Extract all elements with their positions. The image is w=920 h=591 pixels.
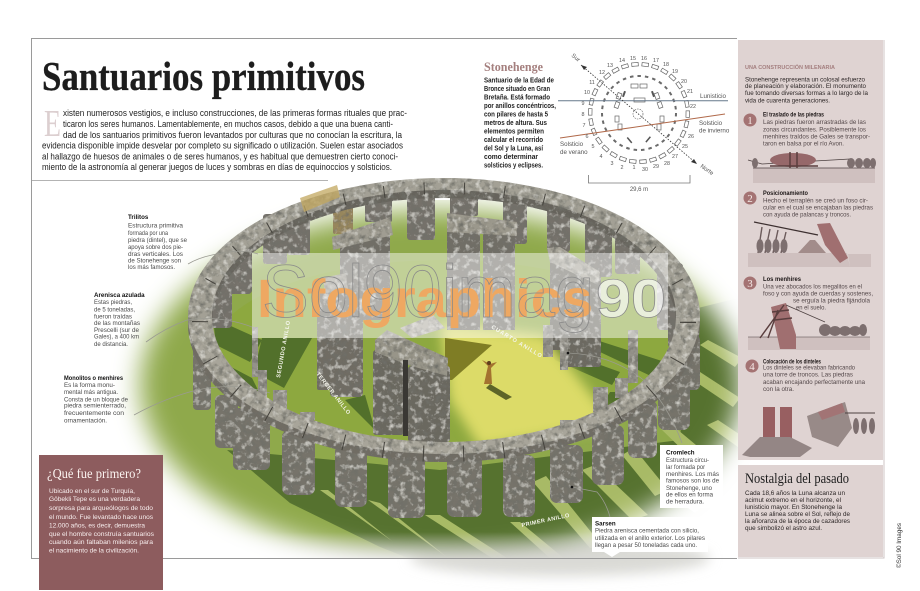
callout: Arenisca azulada: [94, 292, 145, 348]
stone numbers: 6: [586, 134, 588, 140]
callout: Cromlech: lar formada por: [666, 464, 705, 471]
panel: Nostalgia del pasado: la añoranza de la época de cazadores: [745, 518, 850, 525]
step 4 text: [746, 358, 865, 393]
callout: Trilitos: Estructura primitiva: [128, 222, 184, 230]
callout: Cromlech: [660, 445, 723, 513]
dark shadow mass: [227, 302, 738, 554]
stone numbers: 15: [630, 56, 636, 62]
leader lines: [134, 251, 682, 517]
panel: Stonehenge description: Santuario de la Edad de: [484, 78, 554, 84]
intro: [745, 76, 868, 104]
stone numbers: 14: [619, 58, 625, 64]
light streaks: [320, 340, 745, 560]
step 2 text: con ayuda de palancas y troncos.: [763, 212, 851, 218]
callout: Arenisca azulada: Prescelli (sur de: [94, 327, 140, 334]
callout: Sarsen: [592, 517, 708, 557]
callout: Sarsen: Piedra arenisca cementada con silicio,: [595, 528, 699, 534]
step 4 text: Colocación de los dinteles: [763, 358, 821, 366]
panel: Qué fue primero: [39, 455, 163, 590]
label: tercer anillo: TERCER ANILLO: [314, 372, 351, 416]
step 3 text: en el suelo.: [796, 304, 826, 312]
intro text: ticaron los seres humanos. Lamentablemente, en muchos casos, debido a que una buena canti-: [63, 119, 393, 129]
front pillars of outer ring: [193, 335, 700, 518]
label: primer anillo: PRIMER ANILLO: [521, 513, 571, 529]
panel: Qué fue primero: el mundo. Fue levantado hace unos: [49, 514, 153, 521]
lintel joints at the front: [192, 321, 696, 462]
ochre highlighted lintel: [300, 185, 340, 212]
panel: Una construcción milenaria: [738, 40, 883, 460]
label: cuarto anillo: CUARTO ANILLO: [490, 325, 543, 360]
north-south axis: [581, 65, 697, 164]
stone numbers: 16: [641, 56, 647, 62]
step 3 text: Los menhires: [763, 276, 801, 283]
bluestone ring: [602, 76, 676, 150]
panel: Stonehenge description: metros de altura. Sus: [484, 120, 547, 127]
panel: Stonehenge description: como determinar: [484, 154, 538, 161]
stone numbers: 29: [653, 164, 659, 170]
step 3 illustration: raising stone: [748, 303, 870, 350]
callout: Arenisca azulada: fueron traídas: [94, 314, 132, 320]
step 1 text: 1: [747, 115, 753, 127]
interior floor: [212, 260, 676, 444]
callout: Arenisca azulada: Gales), a 400 km: [94, 334, 139, 340]
stone numbers: 10: [584, 90, 590, 96]
back lintels of outer ring: [188, 178, 700, 318]
trilithon upper middle: [447, 213, 517, 330]
callout: Trilitos: Trilitos: [128, 214, 149, 221]
intro text: al hallazgo de huesos de animales o de seres humanos, y es habitual que demuestren cierto conoci-: [42, 152, 398, 162]
panel: Nostalgia del pasado: que simbolizó el astro azul.: [745, 525, 822, 532]
callout: Cromlech: famosos son los de: [666, 478, 720, 484]
intro text: dad de los santuarios primitivos fueron levantados por culturas que no conocían la escritura, la: [63, 130, 402, 140]
callout: Cromlech: Estructura circu-: [666, 457, 709, 464]
panel: Qué fue primero: el nacimiento de la civilización.: [49, 548, 139, 554]
intro: vida de cuarenta generaciones.: [745, 98, 830, 104]
step 2 text: 2: [747, 193, 753, 205]
callout: Monolitos o menhires: Consta de un bloque de: [64, 396, 129, 404]
panel: Nostalgia del pasado: acimut extremo en el horizonte, el: [745, 497, 841, 504]
step 1 text: Las piedras fueron arrastradas de las: [763, 119, 866, 126]
ground shadow: [410, 540, 710, 576]
scale bracket: 29,6 m: [630, 187, 648, 193]
step 4 text: una torre de troncos. Las piedras: [763, 372, 853, 378]
step 2 text: Hecho el terraplén se creó un foso cir-: [763, 198, 868, 204]
callout: Monolitos o menhires: frecuentemente con: [64, 410, 125, 417]
interior shadows: [213, 318, 665, 430]
callout: Trilitos: [128, 214, 188, 271]
panel: Stonehenge description: [484, 59, 556, 170]
callout: Cromlech: Cromlech: [666, 450, 695, 456]
drop cap: E: [44, 103, 61, 145]
callout: Trilitos: formada por una: [128, 230, 168, 237]
gap in front trilithon: [403, 360, 408, 436]
callout: Cromlech: Stonehenge, uno: [666, 485, 713, 492]
step 2 text: Posicionamiento: [763, 190, 808, 197]
intro: Stonehenge representa un colosal esfuerzo: [745, 76, 865, 84]
direction labels: de verano: [560, 149, 588, 156]
callout: Arenisca azulada: de 5 toneladas,: [94, 306, 135, 314]
stone numbers: 3: [610, 161, 614, 167]
intro text: xisten numerosos vestigios, e incluso construcciones, de las primeras formas rituales que prac-: [63, 108, 407, 118]
panel: Qué fue primero: Ubicado en el sur de Turquía,: [49, 488, 135, 495]
stone numbers: 11: [589, 80, 595, 86]
step 1 text: zonas circundantes. Posiblemente los: [763, 126, 866, 134]
callout: Arenisca azulada: Estas piedras,: [94, 299, 132, 306]
stone numbers: 12: [599, 70, 605, 76]
stone numbers: 4: [600, 154, 602, 160]
solstice line: [560, 114, 725, 138]
step 1 text: [744, 112, 870, 148]
step 1 text: taron en balsa por el río Avon.: [763, 140, 844, 148]
panel: Qué fue primero: sorpresa para arqueólogos de todo: [49, 505, 153, 512]
panel: Stonehenge description: por anillos concéntricos,: [484, 103, 556, 110]
direction labels: Norte: [699, 164, 715, 177]
stone numbers: 7: [582, 123, 586, 129]
trilithon right: [547, 247, 601, 367]
step 2 illustration: lever: [748, 222, 871, 267]
step 1 text: El traslado de las piedras: [763, 112, 824, 118]
intro text: [42, 103, 407, 172]
panel: Nostalgia del pasado: lunisticio mayor. En Stonehenge la: [745, 504, 842, 511]
step 2 text: [744, 190, 873, 218]
stone numbers: 17: [653, 58, 659, 64]
panel: Stonehenge description: Bretaña. Está formado: [484, 94, 550, 102]
callout: Trilitos: piedra (dintel), que se: [128, 237, 188, 244]
callout: Cromlech: menhires. Los más: [666, 471, 719, 478]
step 3 text: se erguía la piedra fijándola: [793, 298, 870, 304]
step 4 text: 4: [749, 361, 755, 373]
step 1 text: menhires traídos de Gales se transpor-: [763, 134, 870, 140]
direction labels: Lunisticio: [700, 93, 727, 100]
callout: Arenisca azulada: de las montañas: [94, 320, 140, 327]
bluestones: [252, 325, 638, 428]
stone numbers: 30: [642, 167, 648, 173]
callout: Monolitos o menhires: mental más antigua.: [64, 389, 118, 396]
central stone: [633, 109, 643, 119]
callout: Sarsen: llegan a pesar 50 toneladas cada uno.: [595, 542, 697, 549]
trilithon upper left: [332, 217, 393, 320]
panel: Stonehenge description: solsticios y eclipses.: [484, 162, 543, 170]
title: Santuarios primitivos: [42, 53, 365, 99]
stone numbers: 20: [681, 79, 687, 85]
callout: Cromlech: de ellos en forma: [666, 492, 714, 498]
central altar slab: [400, 315, 445, 338]
step 2 text: cular en el cual se encajaban las piedras: [763, 204, 873, 212]
direction labels: Solsticio: [699, 120, 723, 127]
callout: Monolitos o menhires: [64, 375, 129, 424]
stone numbers: 28: [664, 161, 670, 167]
callout: Trilitos: los más famosos.: [128, 264, 175, 271]
inner horseshoe: [614, 84, 664, 130]
panel: Qué fue primero: cuando aún faltaban milenios para: [49, 539, 153, 546]
stone numbers: 9: [582, 101, 584, 107]
page frame: [32, 38, 737, 558]
stone numbers: 2: [620, 165, 624, 171]
step 3 text: [744, 276, 873, 312]
callout: Monolitos o menhires: piedra semienterrado,: [64, 402, 126, 410]
watermark outline word: Sol90imag: [262, 250, 594, 333]
callout: Sarsen: utilizada en el anillo exterior. Los pilares: [595, 535, 705, 542]
callout: Trilitos: apoya sobre dos pie-: [128, 244, 183, 251]
intro text: evidencia disponible impide desvelar por completo su significado o utilización. Suelen estar asociados: [42, 140, 403, 150]
outer sarsen stones: [588, 62, 690, 164]
lunistice line: [558, 100, 728, 102]
stone numbers: 27: [672, 154, 678, 160]
watermark: [252, 250, 668, 338]
stone numbers: 8: [582, 112, 584, 118]
stone numbers: 19: [672, 69, 678, 75]
ring labels: [276, 320, 571, 529]
watermark band: [252, 253, 668, 338]
shadow on floor beside front trilithon: [445, 338, 492, 380]
step 4 text: acaban encajando perfectamente una: [763, 379, 865, 386]
panel: Stonehenge description: con pilares de hasta 5: [484, 112, 548, 118]
step 3 text: foso y con ayuda de cuerdas y sostenes,: [763, 290, 873, 298]
stone numbers: 25: [682, 144, 688, 150]
panel: Qué fue primero: 12.000 años, es decir, demuestra: [49, 522, 145, 530]
callout: Arenisca azulada: de distancia.: [94, 341, 128, 348]
heading: Stonehenge: Stonehenge: [484, 59, 543, 74]
watermark number: 90: [596, 269, 666, 329]
callout: Monolitos o menhires: Monolitos o menhires: [64, 375, 124, 382]
panel: Nostalgia del pasado: [738, 465, 883, 557]
illustration: Stonehenge reconstruction: [100, 178, 780, 576]
stone numbers: 21: [687, 89, 693, 95]
stone numbers: 18: [663, 62, 669, 68]
step 3 text: Una vez abocados los megalitos en el: [763, 284, 862, 290]
divider under intro: [31, 180, 328, 182]
lintel joints at the back: [205, 182, 683, 286]
stone numbers: 5: [592, 144, 594, 150]
watermark orange word: Infographics: [257, 269, 593, 329]
diagram: Stonehenge plan: [558, 53, 730, 193]
callout: Cromlech: de herradura.: [666, 498, 704, 506]
panel: Qué fue primero: que el hombre construía santuarios: [49, 531, 154, 538]
panel: Stonehenge description: Bronce situado en Gran: [484, 86, 550, 93]
trilithon left: [317, 273, 363, 397]
back pillars of outer ring: [207, 186, 697, 348]
direction labels: de invierno: [699, 128, 730, 134]
intro text: miento de la astronomía al generar juegos de luces y sombras en días de equinoccios y solsticios.: [42, 162, 392, 172]
sunlight beam: [440, 322, 615, 448]
intro: de planeación y elaboración. El monumento: [745, 83, 866, 90]
heading: Nostalgia del pasado: [745, 471, 849, 487]
front lintels of outer ring: [188, 318, 700, 462]
trilithon front: [373, 330, 450, 442]
callout: Trilitos: de Stonehenge son: [128, 258, 182, 264]
step 1 illustration: raft: [748, 152, 876, 183]
panel: Stonehenge description: elementos permiten: [484, 128, 544, 136]
label: segundo anillo: SEGUNDO ANILLO: [276, 320, 292, 378]
stone numbers: 13: [607, 63, 613, 69]
stone numbers: 26: [688, 134, 694, 140]
callout: Monolitos o menhires: Es la forma monu-: [64, 382, 115, 389]
panel: Qué fue primero: Göbekli Tepe es una verdadera: [49, 496, 140, 503]
direction labels: Sur: [570, 53, 581, 64]
direction labels: Solsticio: [560, 141, 584, 148]
stone numbers: [582, 56, 696, 173]
intro: fue tomando diversas formas a lo largo de la: [745, 90, 868, 97]
grass ground with pillar shadows: [100, 200, 780, 560]
panel: Stonehenge description: del Sol y la Luna, así: [484, 146, 544, 152]
heading: ¿Qué fue primero?: [47, 467, 141, 482]
callout: Sarsen: Sarsen: [595, 520, 616, 528]
step 4 illustration: lintel tower: [742, 402, 875, 457]
scale bracket: [588, 175, 690, 193]
stone numbers: 1: [632, 165, 636, 171]
panel: Nostalgia del pasado: Luna se alinea sobre el Sol, reflejo de: [745, 511, 850, 518]
callout: Trilitos: dras verticales. Los: [128, 251, 183, 258]
direction labels: [560, 53, 730, 177]
panel: Stonehenge description: calcular el recorrido: [484, 137, 543, 144]
panel: Nostalgia del pasado: Cada 18,6 años la Luna alcanza un: [745, 490, 845, 497]
callout: Arenisca azulada: Arenisca azulada: [94, 292, 145, 299]
inner stones: horseshoe and bluestones: [252, 213, 638, 442]
step 3 text: 3: [747, 278, 753, 290]
step 4 text: Los dinteles se elevaban fabricando: [763, 364, 855, 372]
step 4 text: con la otra.: [763, 386, 794, 393]
callout: Monolitos o menhires: ornamentación.: [64, 418, 107, 424]
credit: ©Sol 90 Images: [896, 523, 903, 568]
leader dots: [567, 352, 573, 488]
stone numbers: 22: [690, 104, 696, 110]
person in the sunlight: [482, 360, 512, 400]
heading: UNA CONSTRUCCIÓN MILENARIA: [745, 63, 836, 71]
